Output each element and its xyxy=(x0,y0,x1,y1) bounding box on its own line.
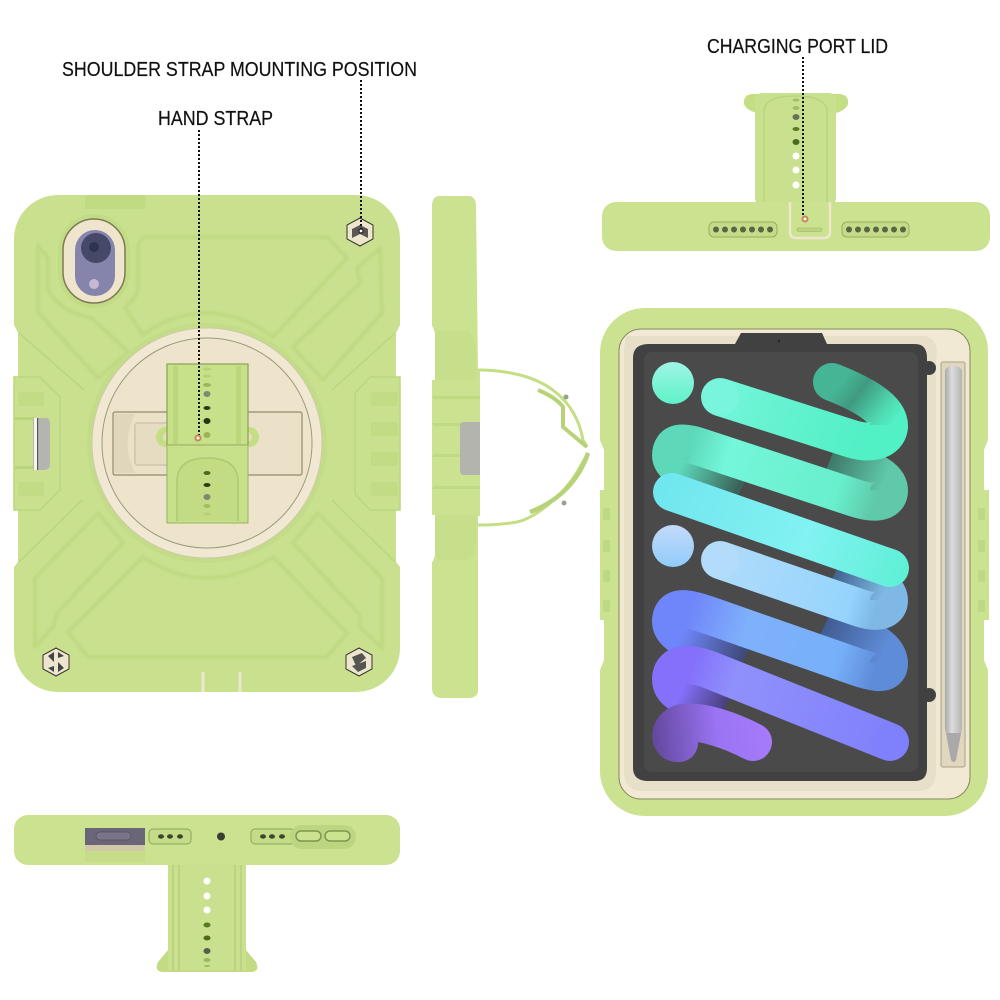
apple pencil xyxy=(945,366,962,762)
case frame xyxy=(600,308,989,816)
case back body xyxy=(14,195,400,692)
charging port xyxy=(85,828,145,862)
speaker grille right xyxy=(842,222,909,237)
screw mount bottom left xyxy=(43,648,69,676)
dotted leader: charging port lid xyxy=(802,57,804,219)
panel: front view with tablet xyxy=(600,308,989,816)
band E front xyxy=(671,609,889,672)
screw mount bottom right xyxy=(346,648,372,676)
panel: back view of case xyxy=(14,195,400,692)
bottom edge body xyxy=(14,815,400,865)
band F return xyxy=(671,679,724,712)
side body xyxy=(432,196,480,698)
left side bumper xyxy=(14,377,60,510)
band A rear xyxy=(832,382,889,426)
dotted leader: shoulder strap xyxy=(360,80,362,231)
screen xyxy=(633,333,936,781)
wallpaper swirl xyxy=(671,378,909,761)
hand strap xyxy=(156,364,259,523)
panel: bottom edge view xyxy=(14,815,400,972)
screw mount top right xyxy=(347,218,373,246)
label: shoulder strap mounting position: SHOULDER STRAP MOUNTING POSITION xyxy=(62,59,417,81)
microphone xyxy=(217,832,225,840)
buttons xyxy=(290,825,356,849)
band B front xyxy=(671,443,889,502)
band A front xyxy=(720,397,889,441)
pencil pocket xyxy=(941,362,965,767)
rotating mount disc xyxy=(87,323,327,563)
strap xyxy=(157,865,257,972)
kickstand xyxy=(113,412,302,475)
panel: top edge view xyxy=(602,93,990,251)
dotted leader: hand strap xyxy=(198,130,200,438)
hand strap loop xyxy=(478,370,588,525)
bottom slits xyxy=(202,672,242,692)
X grooves xyxy=(19,333,395,562)
band G xyxy=(671,722,753,743)
band C xyxy=(672,492,890,568)
speaker grille xyxy=(251,829,295,844)
band F front xyxy=(671,665,890,742)
speaker grille left xyxy=(709,222,777,237)
right side bumper xyxy=(355,377,400,510)
label: hand strap: HAND STRAP xyxy=(158,108,273,130)
speaker grille xyxy=(149,829,191,844)
top notch xyxy=(85,195,145,209)
top edge body xyxy=(602,202,990,251)
band D rear xyxy=(838,567,889,601)
band D front xyxy=(720,560,889,611)
camera cutout xyxy=(58,214,130,308)
strap xyxy=(744,93,848,205)
panel: side view of case xyxy=(432,196,588,698)
marker dots xyxy=(196,216,808,440)
wallpaper circles xyxy=(652,362,694,404)
side slot xyxy=(33,418,50,470)
pocket window xyxy=(961,508,965,608)
recessed X panels xyxy=(35,237,382,657)
band E rear and return xyxy=(827,620,889,664)
charging port lid xyxy=(790,202,830,238)
inner beige bezel xyxy=(619,329,970,799)
side port xyxy=(460,422,480,475)
label: charging port lid: CHARGING PORT LID xyxy=(707,36,888,58)
band B rear and return xyxy=(832,455,889,491)
